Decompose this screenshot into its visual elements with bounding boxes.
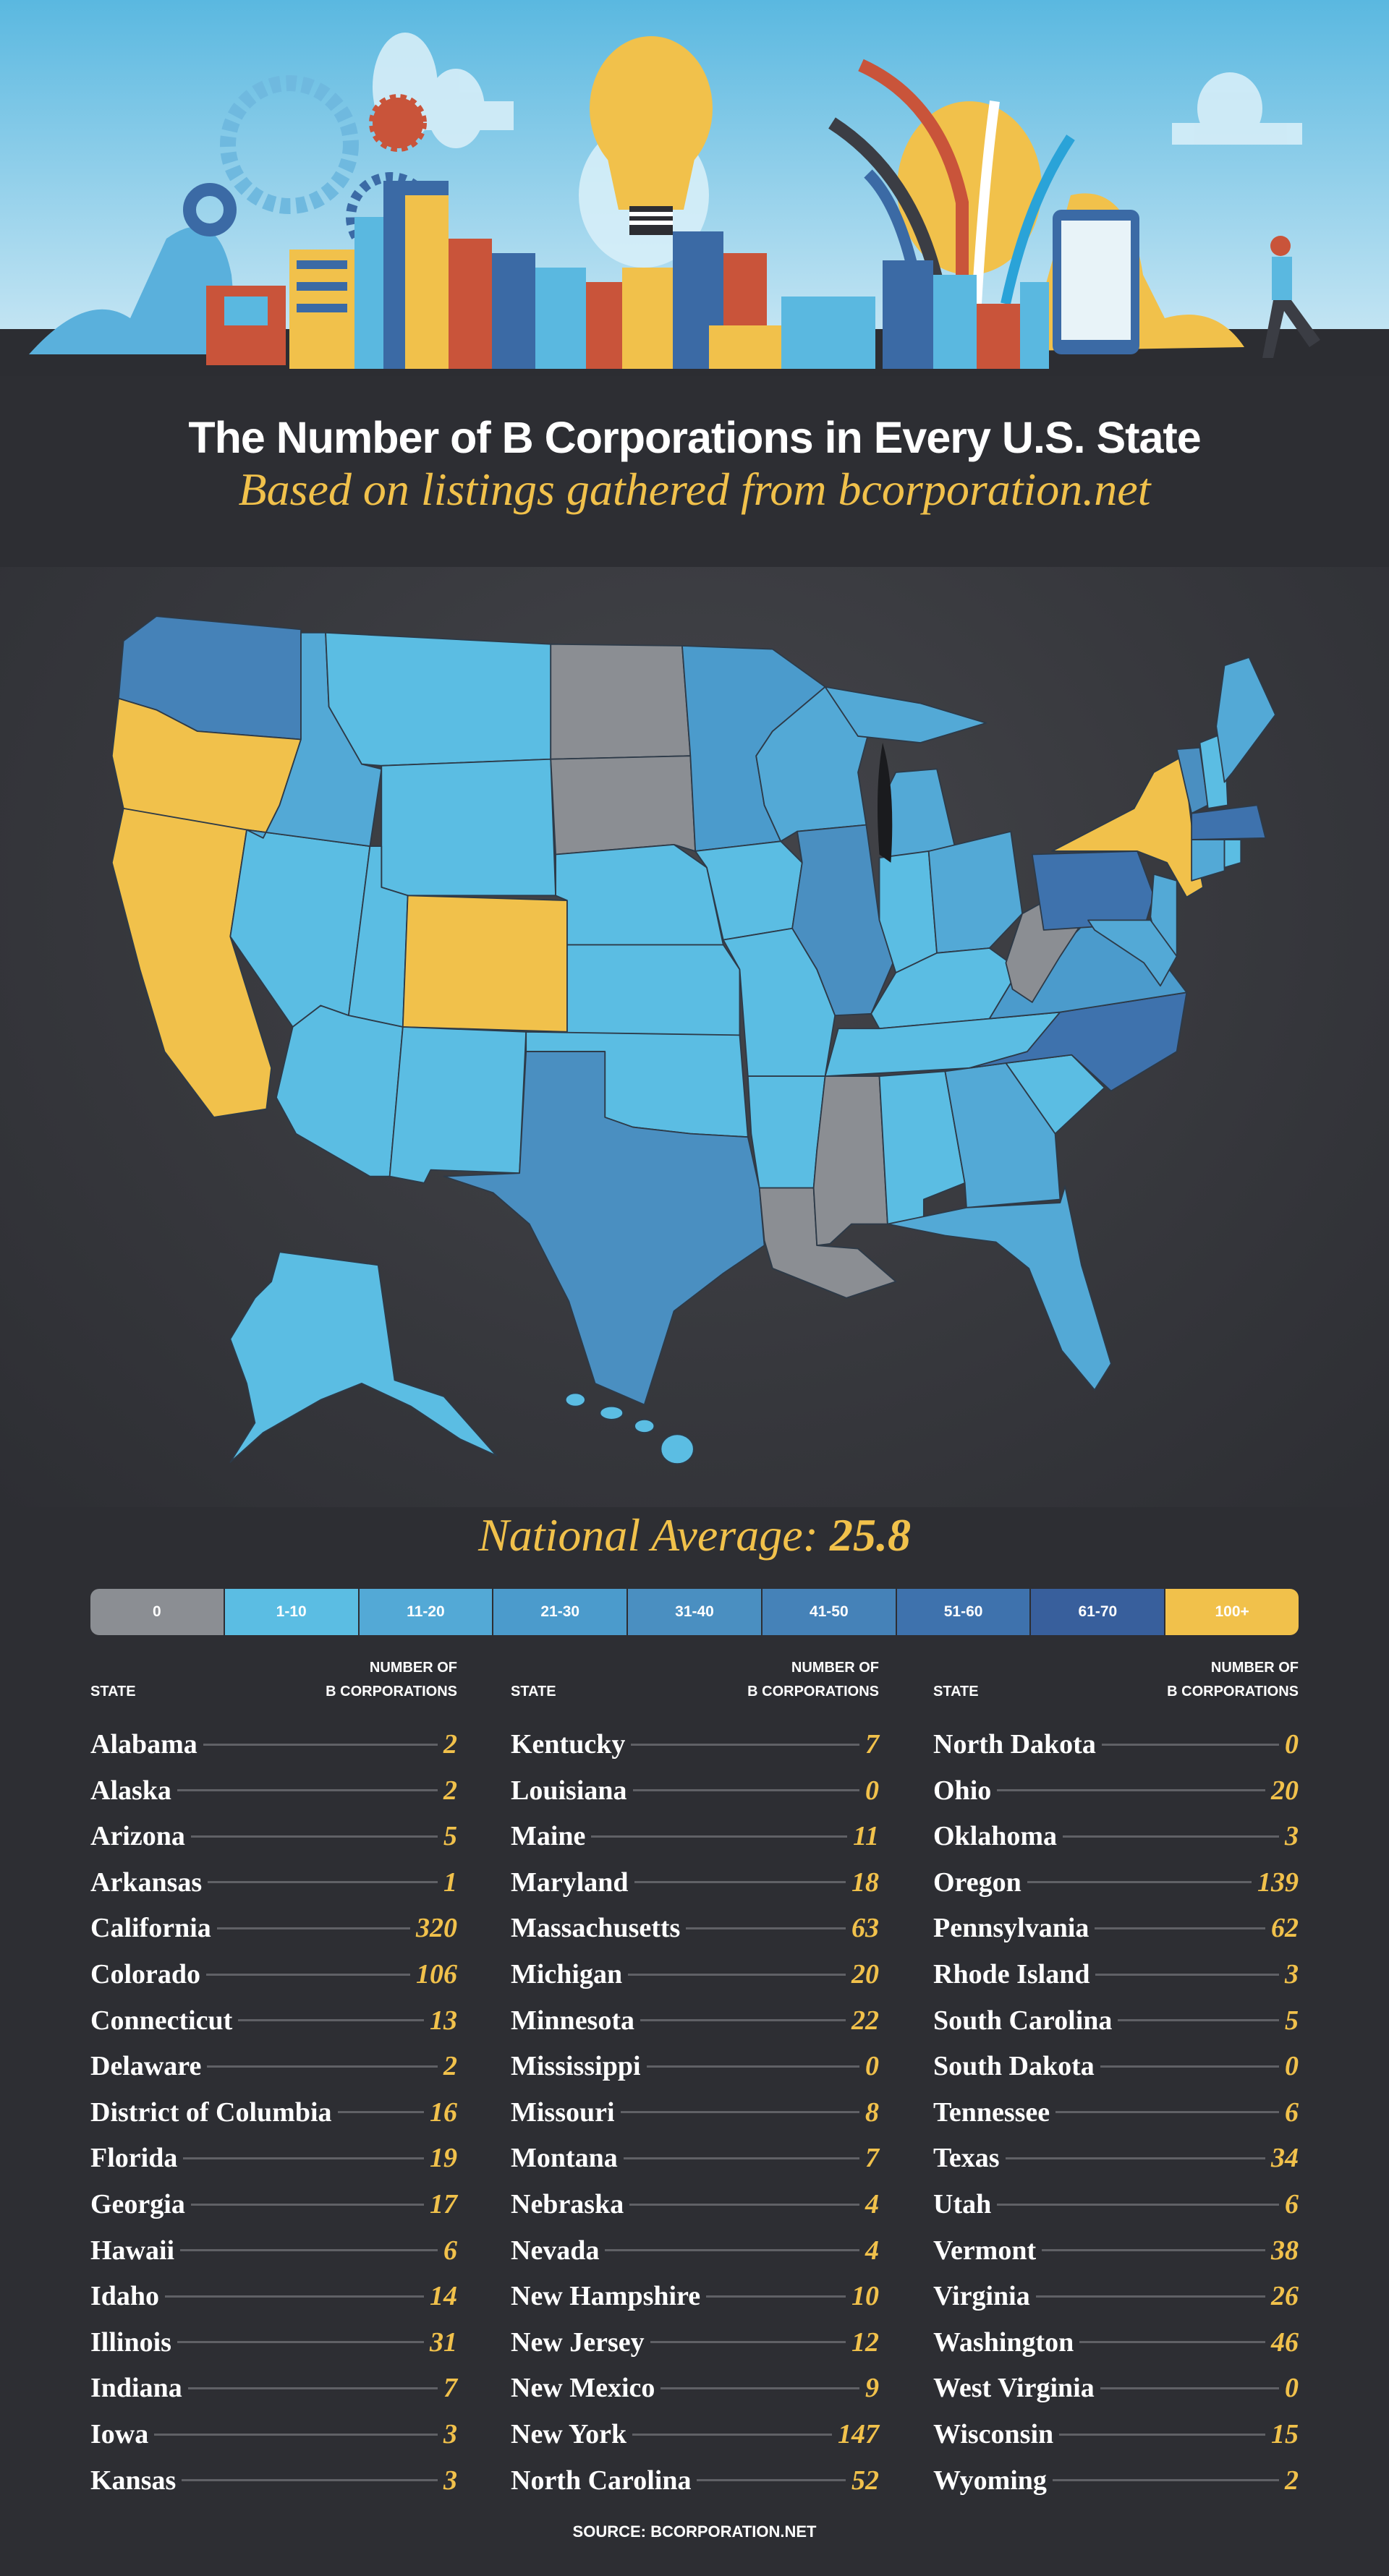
table: column 3: 38 bbox=[1271, 2235, 1299, 2266]
HI bbox=[566, 1394, 694, 1464]
column headers: STATE bbox=[90, 1684, 136, 1699]
table: column 2: 11 bbox=[853, 1821, 879, 1851]
column headers: STATE bbox=[933, 1684, 979, 1699]
table: column 1: 13 bbox=[430, 2005, 457, 2036]
national average: National Average: 25.8 bbox=[478, 1509, 911, 1561]
column headers: NUMBER OF bbox=[1211, 1660, 1299, 1676]
AL bbox=[880, 1071, 965, 1224]
title: The Number of B Corporations in Every U.S. State bbox=[188, 413, 1201, 462]
table: column 2: Nebraska bbox=[511, 2189, 624, 2219]
TX bbox=[444, 1052, 765, 1404]
table: column 3: 3 bbox=[1285, 1959, 1299, 1989]
table: column 2: New Jersey bbox=[511, 2327, 645, 2358]
table: column 2: 63 bbox=[851, 1913, 879, 1943]
legend bar: 21-30 bbox=[540, 1603, 579, 1620]
ND bbox=[551, 644, 690, 759]
table: column 3: Utah bbox=[933, 2189, 991, 2219]
CA bbox=[112, 809, 271, 1117]
table: column 3: Wisconsin bbox=[933, 2419, 1053, 2449]
table: column 1: 7 bbox=[443, 2373, 457, 2403]
table: column 2: 52 bbox=[851, 2465, 879, 2496]
table: column 1: Alabama bbox=[90, 1729, 197, 1760]
table: column 2: 4 bbox=[865, 2189, 879, 2219]
table: column 3: 46 bbox=[1271, 2327, 1299, 2358]
column headers: B CORPORATIONS bbox=[326, 1684, 457, 1699]
table: column 3: 26 bbox=[1271, 2281, 1299, 2311]
lightbulb bbox=[590, 36, 713, 181]
table: column 2: 20 bbox=[851, 1959, 879, 1989]
table: column 3: Rhode Island bbox=[933, 1959, 1089, 1989]
table: column 1: Arizona bbox=[90, 1821, 185, 1851]
MN bbox=[682, 646, 825, 851]
table: column 2: 7 bbox=[865, 1729, 879, 1760]
column headers: B CORPORATIONS bbox=[747, 1684, 879, 1699]
table: column 2: Minnesota bbox=[511, 2005, 634, 2036]
legend bar: 61-70 bbox=[1078, 1603, 1117, 1620]
table: column 2 bbox=[511, 1729, 880, 2496]
table: column 1: Georgia bbox=[90, 2189, 185, 2219]
KS bbox=[567, 944, 739, 1035]
table: column 3: 6 bbox=[1285, 2097, 1299, 2128]
VT bbox=[1177, 748, 1208, 814]
NY bbox=[1052, 756, 1203, 897]
table: column 3: Texas bbox=[933, 2143, 1000, 2173]
legend bar: 1-10 bbox=[276, 1603, 307, 1620]
table: column 3: South Carolina bbox=[933, 2005, 1112, 2036]
IL bbox=[792, 825, 896, 1015]
NJ bbox=[1150, 874, 1177, 956]
table: column 1: 16 bbox=[430, 2097, 457, 2128]
legend bar: 41-50 bbox=[810, 1603, 849, 1620]
ME bbox=[1216, 657, 1275, 782]
SD bbox=[551, 756, 695, 855]
table: column 1: Hawaii bbox=[90, 2235, 174, 2266]
table: column 1: Indiana bbox=[90, 2373, 182, 2403]
NH bbox=[1199, 733, 1228, 809]
table: column 1: 31 bbox=[430, 2327, 457, 2358]
NE bbox=[556, 845, 723, 944]
runner bbox=[1262, 236, 1320, 358]
table: column 2: Montana bbox=[511, 2143, 618, 2173]
table: column 2: Missouri bbox=[511, 2097, 615, 2128]
TN bbox=[825, 1012, 1060, 1076]
table: column 3: West Virginia bbox=[933, 2373, 1095, 2403]
table: column 2: 0 bbox=[865, 1775, 879, 1806]
table: column 3: 6 bbox=[1285, 2189, 1299, 2219]
table: column 3: 3 bbox=[1285, 1821, 1299, 1851]
table: column 1: 17 bbox=[430, 2189, 457, 2219]
AR bbox=[748, 1076, 825, 1188]
MI bbox=[880, 769, 956, 863]
legend bar: 51-60 bbox=[944, 1603, 982, 1620]
table: column 1: District of Columbia bbox=[90, 2097, 332, 2128]
table: column 2: 10 bbox=[851, 2281, 879, 2311]
table: column 1: 6 bbox=[443, 2235, 457, 2266]
table: column 3: Oregon bbox=[933, 1867, 1021, 1898]
table: column 3: 34 bbox=[1271, 2143, 1299, 2173]
OH bbox=[929, 832, 1022, 953]
table: column 2: Nevada bbox=[511, 2235, 599, 2266]
table: column 2: Maine bbox=[511, 1821, 585, 1851]
gears bbox=[228, 83, 351, 206]
AZ bbox=[276, 1005, 403, 1177]
CT bbox=[1192, 840, 1225, 881]
ID bbox=[247, 633, 381, 846]
table: column 2: 0 bbox=[865, 2051, 879, 2081]
arrows bbox=[861, 65, 962, 362]
FL bbox=[888, 1186, 1111, 1390]
UT bbox=[349, 846, 408, 1027]
US map bbox=[111, 616, 1276, 1464]
table: column 1: California bbox=[90, 1913, 211, 1943]
table: column 2: 22 bbox=[851, 2005, 879, 2036]
MS bbox=[814, 1076, 888, 1245]
table: column 1: 2 bbox=[443, 1729, 457, 1760]
table: column 2: Maryland bbox=[511, 1867, 629, 1898]
table: column 3: 0 bbox=[1285, 2051, 1299, 2081]
table: column 2: Louisiana bbox=[511, 1775, 627, 1806]
table: column 3: 0 bbox=[1285, 1729, 1299, 1760]
table: column 2: Michigan bbox=[511, 1959, 622, 1989]
AK bbox=[230, 1252, 496, 1462]
table: column 2: Mississippi bbox=[511, 2051, 641, 2081]
table: column 1: 2 bbox=[443, 2051, 457, 2081]
OR bbox=[112, 699, 301, 838]
OK bbox=[526, 1032, 748, 1137]
table: column 2: New York bbox=[511, 2419, 626, 2449]
legend bar bbox=[90, 1589, 1299, 1635]
legend bar: 0 bbox=[153, 1603, 161, 1620]
column headers: NUMBER OF bbox=[370, 1660, 457, 1676]
legend bar: 100+ bbox=[1215, 1603, 1249, 1620]
table: column 2: New Hampshire bbox=[511, 2281, 700, 2311]
source: SOURCE: BCORPORATION.NET bbox=[573, 2522, 816, 2541]
table: column 3: 5 bbox=[1285, 2005, 1299, 2036]
table: column 3: Wyoming bbox=[933, 2465, 1047, 2496]
table: column 1: Connecticut bbox=[90, 2005, 232, 2036]
table: column 2: 147 bbox=[838, 2419, 879, 2449]
RI bbox=[1225, 840, 1241, 868]
NM bbox=[390, 1027, 526, 1183]
WA bbox=[119, 616, 301, 739]
table: column 1: Delaware bbox=[90, 2051, 201, 2081]
legend bar: 31-40 bbox=[675, 1603, 714, 1620]
table: column 3: Vermont bbox=[933, 2235, 1036, 2266]
table: column 3: Virginia bbox=[933, 2281, 1030, 2311]
column headers: B CORPORATIONS bbox=[1167, 1684, 1299, 1699]
table: column 1: Illinois bbox=[90, 2327, 171, 2358]
NV bbox=[230, 829, 370, 1027]
table: column 2: 18 bbox=[851, 1867, 879, 1898]
MT bbox=[326, 633, 551, 766]
MD bbox=[1088, 920, 1177, 986]
SC bbox=[1006, 1055, 1105, 1134]
GA bbox=[945, 1063, 1060, 1208]
table: column 1: Kansas bbox=[90, 2465, 176, 2496]
MA bbox=[1192, 805, 1265, 840]
table: column 1: 106 bbox=[416, 1959, 457, 1989]
header illustration bbox=[0, 0, 1389, 369]
MO bbox=[723, 929, 835, 1076]
IN bbox=[880, 851, 937, 973]
table: column 3: 15 bbox=[1271, 2419, 1299, 2449]
table: column 2: North Carolina bbox=[511, 2465, 691, 2496]
WI bbox=[756, 687, 871, 841]
column headers: NUMBER OF bbox=[791, 1660, 879, 1676]
table: column 2: 9 bbox=[865, 2373, 879, 2403]
table: column 2: Kentucky bbox=[511, 1729, 625, 1760]
table: column 3: Pennsylvania bbox=[933, 1913, 1089, 1943]
LA bbox=[760, 1188, 896, 1298]
table: column 3 bbox=[933, 1729, 1299, 2496]
table: column 1: Alaska bbox=[90, 1775, 171, 1806]
table: column 1: 3 bbox=[443, 2465, 457, 2496]
WY bbox=[381, 759, 556, 895]
table: column 1: 19 bbox=[430, 2143, 457, 2173]
table: column 3: Tennessee bbox=[933, 2097, 1050, 2128]
table: column 3: 62 bbox=[1271, 1913, 1299, 1943]
VA bbox=[990, 920, 1186, 1019]
table: column 1: 14 bbox=[430, 2281, 457, 2311]
legend bar: 11-20 bbox=[407, 1603, 445, 1620]
column headers bbox=[90, 1660, 1299, 1699]
table: column 1: 320 bbox=[416, 1913, 457, 1943]
table: column 2: Massachusetts bbox=[511, 1913, 680, 1943]
buildings bbox=[206, 181, 1139, 369]
NC bbox=[969, 992, 1186, 1091]
table: column 1: 1 bbox=[443, 1867, 457, 1898]
table: column 1 bbox=[90, 1729, 459, 2496]
subtitle: Based on listings gathered from bcorporation.net bbox=[239, 464, 1150, 515]
table: column 3: Washington bbox=[933, 2327, 1074, 2358]
table: column 3: 2 bbox=[1285, 2465, 1299, 2496]
table: column 1: Florida bbox=[90, 2143, 177, 2173]
table: column 1: Colorado bbox=[90, 1959, 200, 1989]
table: column 3: Ohio bbox=[933, 1775, 991, 1806]
WV bbox=[1006, 897, 1088, 1002]
table: column 3: South Dakota bbox=[933, 2051, 1095, 2081]
table: column 2: 12 bbox=[851, 2327, 879, 2358]
table: column 1: Iowa bbox=[90, 2419, 148, 2449]
table: column 2: 8 bbox=[865, 2097, 879, 2128]
table: column 3: 0 bbox=[1285, 2373, 1299, 2403]
table: column 1: Arkansas bbox=[90, 1867, 202, 1898]
table: column 1: 2 bbox=[443, 1775, 457, 1806]
column headers: STATE bbox=[511, 1684, 556, 1699]
table: column 1: 5 bbox=[443, 1821, 457, 1851]
table: column 2: 4 bbox=[865, 2235, 879, 2266]
table: column 1: Idaho bbox=[90, 2281, 159, 2311]
table: column 2: 7 bbox=[865, 2143, 879, 2173]
table: column 2: New Mexico bbox=[511, 2373, 655, 2403]
KY bbox=[871, 948, 1019, 1028]
IA bbox=[695, 841, 802, 940]
table: column 1: 3 bbox=[443, 2419, 457, 2449]
table: column 3: Oklahoma bbox=[933, 1821, 1057, 1851]
CO bbox=[403, 895, 567, 1032]
map panel background bbox=[0, 567, 1389, 1507]
table: column 3: 20 bbox=[1271, 1775, 1299, 1806]
table: column 3: North Dakota bbox=[933, 1729, 1096, 1760]
clouds bbox=[373, 33, 1302, 268]
PA bbox=[1032, 851, 1154, 930]
table: column 3: 139 bbox=[1257, 1867, 1299, 1898]
